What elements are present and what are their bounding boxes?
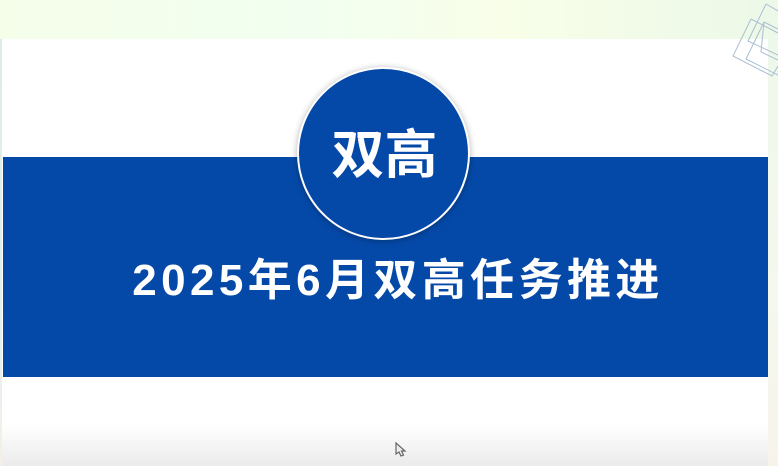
background: bottom grey fade	[2, 425, 768, 466]
icon: decorative rotated squares	[732, 4, 778, 76]
circle badge	[297, 67, 470, 240]
badge text: 双高	[332, 126, 438, 185]
icon: mouse cursor	[395, 442, 406, 457]
background: left edge strip	[0, 39, 2, 466]
background: top pale green strip	[0, 0, 778, 39]
blue banner	[3, 157, 768, 377]
banner title: 2025年6月双高任务推进	[132, 256, 664, 305]
background: right edge strip	[768, 39, 778, 466]
